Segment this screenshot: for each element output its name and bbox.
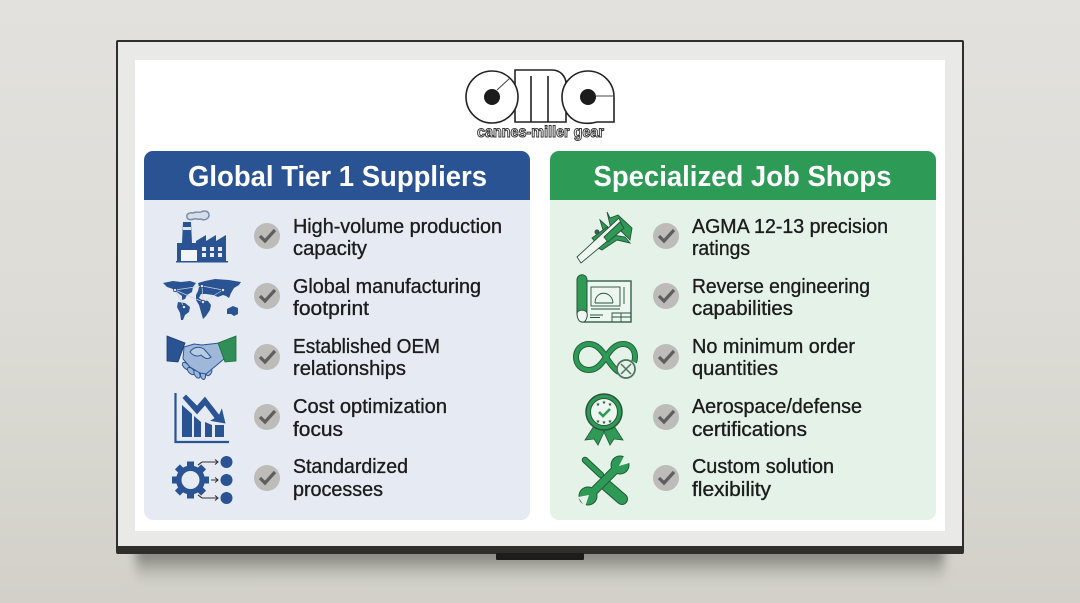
panel: Global Tier 1 Suppliers bbox=[144, 151, 530, 520]
icon: certification rosette: ★ bbox=[602, 420, 607, 426]
text: Custom solution flexibility: Custom solution bbox=[692, 456, 834, 478]
icon: certification rosette: ★ bbox=[608, 402, 613, 408]
text: High-volume production capacity: capacity bbox=[293, 238, 367, 260]
check 2 bbox=[653, 283, 679, 309]
check 4 bbox=[254, 404, 280, 430]
text: No minimum order quantities: quantities bbox=[692, 358, 778, 380]
icon: blueprint bbox=[577, 275, 631, 322]
text: AGMA 12-13 precision ratings: AGMA 12-13 precision bbox=[692, 216, 888, 238]
heading: Global Tier 1 Suppliers bbox=[144, 151, 530, 200]
icon: wrench and screwdriver bbox=[578, 452, 636, 507]
icon: caliper bbox=[577, 212, 632, 263]
text: Cost optimization focus: Cost optimization bbox=[293, 396, 447, 418]
monitor shadow bbox=[136, 548, 944, 588]
icon: certification rosette: ★ bbox=[596, 402, 601, 408]
icon: certification rosette bbox=[585, 394, 623, 445]
check 5 bbox=[254, 465, 280, 491]
icon: certification rosette: ★ bbox=[608, 419, 613, 425]
text: Standardized processes: Standardized bbox=[293, 456, 408, 478]
heading: Global Tier 1 Suppliers: Global Tier 1 Suppliers bbox=[188, 161, 487, 193]
text: Custom solution flexibility: flexibility bbox=[692, 479, 771, 501]
text: High-volume production capacity: High-volume production bbox=[293, 216, 502, 238]
monitor frame bbox=[116, 40, 964, 560]
icon: cost reduction chart bbox=[176, 393, 229, 442]
icon: world map bbox=[163, 279, 241, 320]
logo: cannes-miller gear: cannes-miller gear bbox=[477, 124, 604, 141]
check 4 bbox=[653, 404, 679, 430]
text: Established OEM relationships: Established OEM bbox=[293, 336, 440, 358]
check 3 bbox=[254, 344, 280, 370]
text: Reverse engineering capabilities: Reverse engineering bbox=[692, 276, 870, 298]
text: Established OEM relationships: relationships bbox=[293, 358, 406, 380]
text: Reverse engineering capabilities: capabilities bbox=[692, 298, 793, 320]
heading: Specialized Job Shops: Specialized Job Shops bbox=[594, 161, 892, 193]
check 5 bbox=[653, 465, 679, 491]
check 3 bbox=[653, 344, 679, 370]
text: AGMA 12-13 precision ratings: ratings bbox=[692, 238, 750, 260]
check 1 bbox=[653, 223, 679, 249]
logo: cannes-miller gear bbox=[466, 70, 614, 141]
text: Global manufacturing footprint: Global manufacturing bbox=[293, 276, 481, 298]
heading: Specialized Job Shops bbox=[550, 151, 936, 200]
icon: factory bbox=[176, 211, 228, 262]
text: No minimum order quantities: No minimum order bbox=[692, 336, 855, 358]
text: Global manufacturing footprint: footprint bbox=[293, 298, 369, 320]
icon: handshake bbox=[167, 336, 236, 380]
check 1 bbox=[254, 223, 280, 249]
icon: certification rosette: ★ bbox=[602, 400, 607, 406]
icon: infinity with cross bbox=[576, 344, 635, 378]
text: Cost optimization focus: focus bbox=[293, 419, 343, 441]
panel: Specialized Job Shops bbox=[550, 151, 936, 520]
icon: certification rosette: ★ bbox=[596, 419, 601, 425]
text: Standardized processes: processes bbox=[293, 479, 383, 501]
icon: gear with process nodes bbox=[172, 456, 232, 504]
text: Aerospace/defense certifications: Aerospace/defense bbox=[692, 396, 862, 418]
check 2 bbox=[254, 283, 280, 309]
text: Aerospace/defense certifications: certifications bbox=[692, 419, 807, 441]
